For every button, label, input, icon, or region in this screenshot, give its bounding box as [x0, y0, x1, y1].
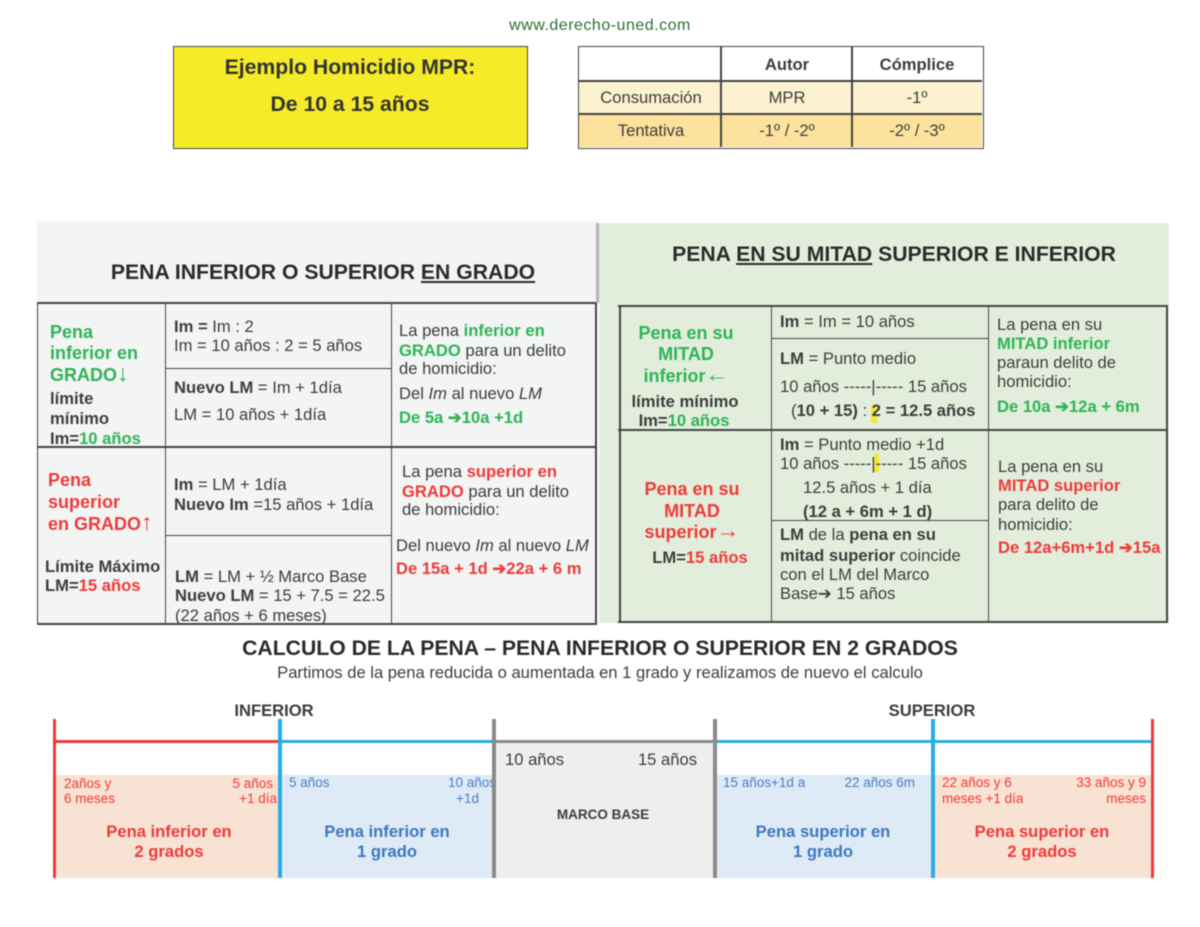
line: LM = 10 años + 1día: [174, 405, 326, 424]
range end line 2: +1 día: [239, 791, 277, 806]
value: -1º / -2º: -1º / -2º: [759, 121, 815, 140]
range: De 5a ➔10a +1d: [399, 408, 523, 427]
line: Pena en su: [638, 323, 734, 343]
range start line 2: 6 meses: [64, 791, 115, 806]
line: MITAD: [658, 344, 714, 364]
formula: Im superior: [174, 475, 374, 514]
separator between panels: [596, 223, 599, 303]
panel: pena en grado: [37, 221, 597, 625]
line: con el LM del Marco: [780, 565, 929, 584]
range: De 10a ➔12a + 6m: [997, 397, 1140, 416]
line: Nuevo Im =15 años + 1día: [174, 495, 373, 514]
line: La pena superior en: [402, 462, 557, 481]
line: GRADO para un delito: [399, 341, 566, 360]
value: MPR: MPR: [769, 88, 805, 107]
table: autor y cómplice: [578, 46, 984, 149]
line: GRADO para un delito: [402, 482, 569, 501]
line: 10 años -----|----- 15 años: [780, 454, 967, 473]
range end: 22 años 6m: [844, 775, 915, 790]
explanation: mitad superior: [998, 456, 1167, 561]
LM value: LM=15 años: [45, 576, 140, 595]
line: mitad superior coincide: [780, 546, 961, 565]
límite mínimo: límite: [50, 389, 93, 408]
line: (10 + 15) : 2 = 12.5 años: [791, 401, 976, 420]
website url: www.derecho-uned.com: [509, 17, 691, 34]
explanation: inferior en grado: [398, 321, 566, 427]
explanation: superior en grado: [396, 462, 590, 578]
heading: pena inferior o superior en grado: PENA INFERIOR O SUPERIOR EN GRADO: [111, 261, 535, 284]
band title: Pena inferior en: [324, 822, 450, 841]
label: inferior: INFERIOR: [234, 701, 314, 720]
line: homicidio:: [997, 372, 1072, 391]
end: 15 años: [638, 750, 697, 769]
line: inferior←: [643, 361, 729, 387]
Im value: Im=10 años: [50, 429, 141, 448]
límite máximo: Límite Máximo: [45, 557, 160, 576]
line: Im = Im : 2: [174, 317, 254, 336]
label: mitad inferior: [632, 323, 738, 430]
highlight: [871, 405, 877, 423]
line: MITAD inferior: [997, 334, 1110, 353]
line: homicidio:: [998, 515, 1073, 534]
band: inferior 2 grados: [54, 775, 279, 878]
green title line 2: inferior en: [50, 343, 138, 363]
line: Im = 10 años : 2 = 5 años: [174, 336, 362, 355]
line: Nuevo LM = Im + 1día: [174, 378, 342, 397]
explanation: mitad inferior: [997, 315, 1140, 416]
band title: Pena superior en: [975, 822, 1109, 841]
header: autor: Autor: [765, 55, 809, 74]
line: LM de la pena en su: [780, 525, 936, 544]
label: MARCO BASE: [557, 807, 649, 822]
formula: Im inferior: [174, 317, 362, 355]
band title line 2: 1 grado: [793, 842, 853, 861]
band title line 2: 2 grados: [134, 842, 204, 861]
line: La pena en su: [997, 315, 1102, 334]
red title line 3: en GRADO↑: [48, 509, 153, 535]
label: pena superior en grado: [45, 470, 160, 595]
range: De 15a + 1d ➔22a + 6 m: [396, 559, 582, 578]
label: superior: SUPERIOR: [889, 701, 975, 720]
line: (12 a + 6m + 1 d): [803, 502, 932, 521]
panel: example box: [173, 46, 528, 149]
range end: 5 años: [232, 776, 273, 791]
formula: Im mitad inferior: Im = Im = 10 años: [780, 312, 915, 331]
panel: pena en su mitad: [599, 223, 1169, 623]
green title line 1: Pena: [50, 322, 93, 342]
line: Del Im al nuevo LM: [399, 384, 542, 403]
example range: De 10 a 15 años: [270, 93, 430, 116]
heading: pena en su mitad superior e inferior: PENA EN SU MITAD SUPERIOR E INFERIOR: [672, 243, 1116, 266]
formula: Im punto medio: [780, 435, 967, 521]
Im value: Im=10 años: [639, 411, 729, 430]
band: superior 2 grados: [932, 775, 1152, 878]
line: Im = Punto medio +1d: [780, 435, 944, 454]
line: de homicidio:: [402, 500, 500, 519]
line: La pena en su: [998, 457, 1103, 476]
range: De 12a+6m+1d ➔15a: [998, 538, 1160, 557]
range end line 2: +1d: [456, 791, 479, 806]
formula: nuevo LM inferior: [174, 378, 342, 424]
line: Im = LM + 1día: [174, 475, 287, 494]
range start: 2años y: [64, 776, 111, 791]
line: MITAD superior: [998, 476, 1120, 495]
band: inferior 1 grado: [279, 775, 493, 878]
band title: Pena superior en: [756, 822, 890, 841]
LM value: LM=15 años: [652, 548, 748, 567]
line: Pena en su: [644, 479, 740, 499]
highlight: [874, 454, 879, 472]
heading: cálculo de la pena: CALCULO DE LA PENA – PENA INFERIOR O SUPERIOR EN 2 GRADOS: [242, 637, 958, 660]
value: -2º / -3º: -2º / -3º: [889, 121, 945, 140]
label: consumación: Consumación: [600, 88, 702, 107]
formula: nuevo LM superior: [175, 567, 385, 625]
band: marco base: [493, 741, 714, 878]
line: paraun delito de: [997, 353, 1116, 372]
band: superior 1 grado: [714, 775, 932, 878]
line: Del nuevo Im al nuevo LM: [396, 536, 589, 555]
row: consumación: [579, 80, 982, 113]
band title line 2: 1 grado: [357, 842, 417, 861]
line: para delito de: [998, 495, 1099, 514]
band title: Pena inferior en: [106, 822, 232, 841]
line: de homicidio:: [399, 359, 497, 378]
formula: LM mitad superior: [780, 525, 961, 603]
red title line 2: superior: [48, 492, 120, 512]
band title line 2: 2 grados: [1007, 842, 1077, 861]
line: 12.5 años + 1 día: [803, 478, 932, 497]
line: Base➔ 15 años: [780, 584, 895, 603]
límite mínimo: límite mínimo: [632, 392, 738, 411]
label: tentativa: Tentativa: [618, 121, 684, 140]
value: -1º: -1º: [907, 88, 927, 107]
start: 10 años: [505, 750, 564, 769]
range start: 5 años: [289, 775, 330, 790]
label: mitad superior: [644, 479, 748, 567]
line: superior→: [644, 517, 740, 543]
label: pena inferior en grado: [50, 322, 141, 448]
green title line 3: GRADO↓: [50, 360, 128, 386]
scale chart: [52, 719, 1155, 879]
range start line 2: meses +1 día: [942, 791, 1023, 806]
límite mínimo line 2: mínimo: [50, 409, 109, 428]
range end line 2: meses: [1106, 791, 1146, 806]
row: tentativa: [579, 113, 982, 147]
range start: 22 años y 6: [942, 775, 1012, 790]
formula: LM punto medio: [780, 349, 976, 424]
line: (22 años + 6 meses): [175, 606, 327, 625]
line: La pena inferior en: [399, 321, 545, 340]
subheading: Partimos de la pena reducida o aumentada en 1 grado y realizamos de nuevo el calculo: [277, 663, 923, 682]
header: cómplice: Cómplice: [880, 55, 954, 74]
line: Nuevo LM = 15 + 7.5 = 22.5: [175, 586, 385, 605]
line: LM = LM + ½ Marco Base: [175, 567, 367, 586]
range end: 33 años y 9: [1076, 775, 1146, 790]
line: MITAD: [664, 501, 720, 521]
red title line 1: Pena: [48, 470, 91, 490]
example heading: Ejemplo Homicidio MPR:: [225, 56, 475, 79]
range start: 15 años+1d a: [723, 775, 805, 790]
line: LM = Punto medio: [780, 349, 916, 368]
line: 10 años -----|----- 15 años: [780, 377, 967, 396]
